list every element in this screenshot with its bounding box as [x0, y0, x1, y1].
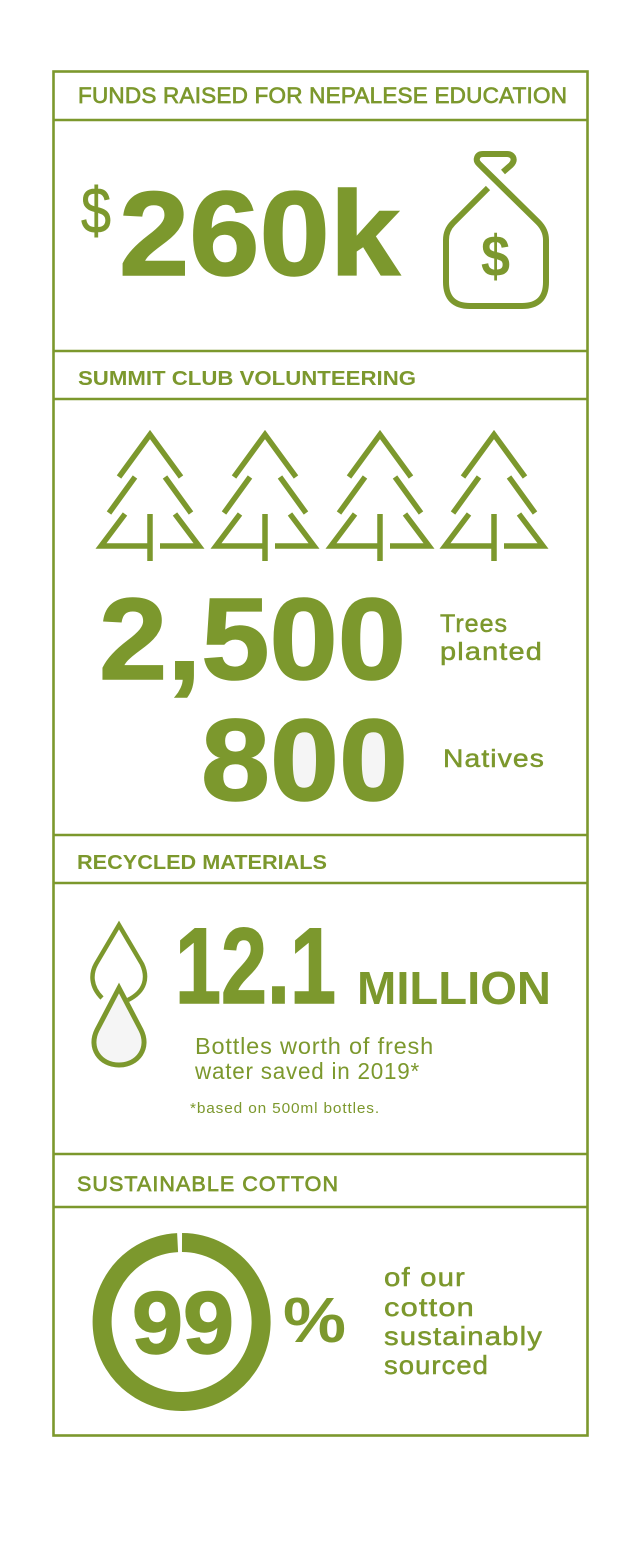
label: trees planted: Trees — [440, 610, 508, 638]
small dollar sign: $ — [81, 174, 111, 247]
panel: summit club volunteering — [78, 367, 545, 825]
heading: funds raised: FUNDS RAISED FOR NEPALESE EDUCATION — [78, 83, 567, 108]
text: cotton description: of our — [384, 1262, 466, 1292]
figure: 2,500: 2,500 — [99, 574, 406, 704]
outer frame — [54, 72, 588, 1436]
figure: 12.1: 12.1 — [175, 905, 336, 1026]
figure: 99: 99 — [132, 1273, 234, 1372]
heading: volunteering: SUMMIT CLUB VOLUNTEERING — [78, 367, 416, 390]
text: bottles saved — [194, 1033, 434, 1084]
text: cotton description: cotton — [384, 1292, 475, 1322]
counter shading in 800 — [290, 724, 389, 788]
icon: money bag: $ — [481, 224, 510, 289]
heading: sustainable cotton: SUSTAINABLE COTTON — [77, 1172, 338, 1196]
text: bottles saved: water saved in 2019* — [194, 1058, 420, 1084]
footnote: *based on 500ml bottles. — [190, 1101, 380, 1117]
figure unit: million: MILLION — [357, 962, 551, 1014]
icon: tree 4 — [445, 434, 543, 561]
icon: money bag — [446, 154, 546, 306]
label: natives: Natives — [443, 745, 545, 773]
figure: percent sign: % — [283, 1284, 346, 1356]
label: trees planted — [440, 610, 543, 666]
figure: 260k: 260k — [119, 167, 400, 301]
text: bottles saved: Bottles worth of fresh — [195, 1033, 434, 1059]
icon: tree 3 — [331, 434, 429, 561]
panel: recycled materials — [77, 851, 551, 1117]
figure: 800: 800 — [201, 695, 408, 825]
text: cotton description: sourced — [384, 1350, 489, 1380]
label: trees planted: planted — [440, 638, 543, 666]
icon: water drops — [92, 925, 145, 1065]
text: cotton description: sustainably — [384, 1321, 543, 1351]
icon: tree 1 — [101, 434, 199, 561]
panel: sustainable cotton — [77, 1172, 543, 1401]
text: cotton description — [384, 1262, 543, 1380]
heading: recycled materials: RECYCLED MATERIALS — [77, 851, 327, 874]
chart: 99 percent ring — [102, 1242, 261, 1401]
icon: tree 2 — [216, 434, 314, 561]
panel: funds raised — [78, 83, 567, 306]
